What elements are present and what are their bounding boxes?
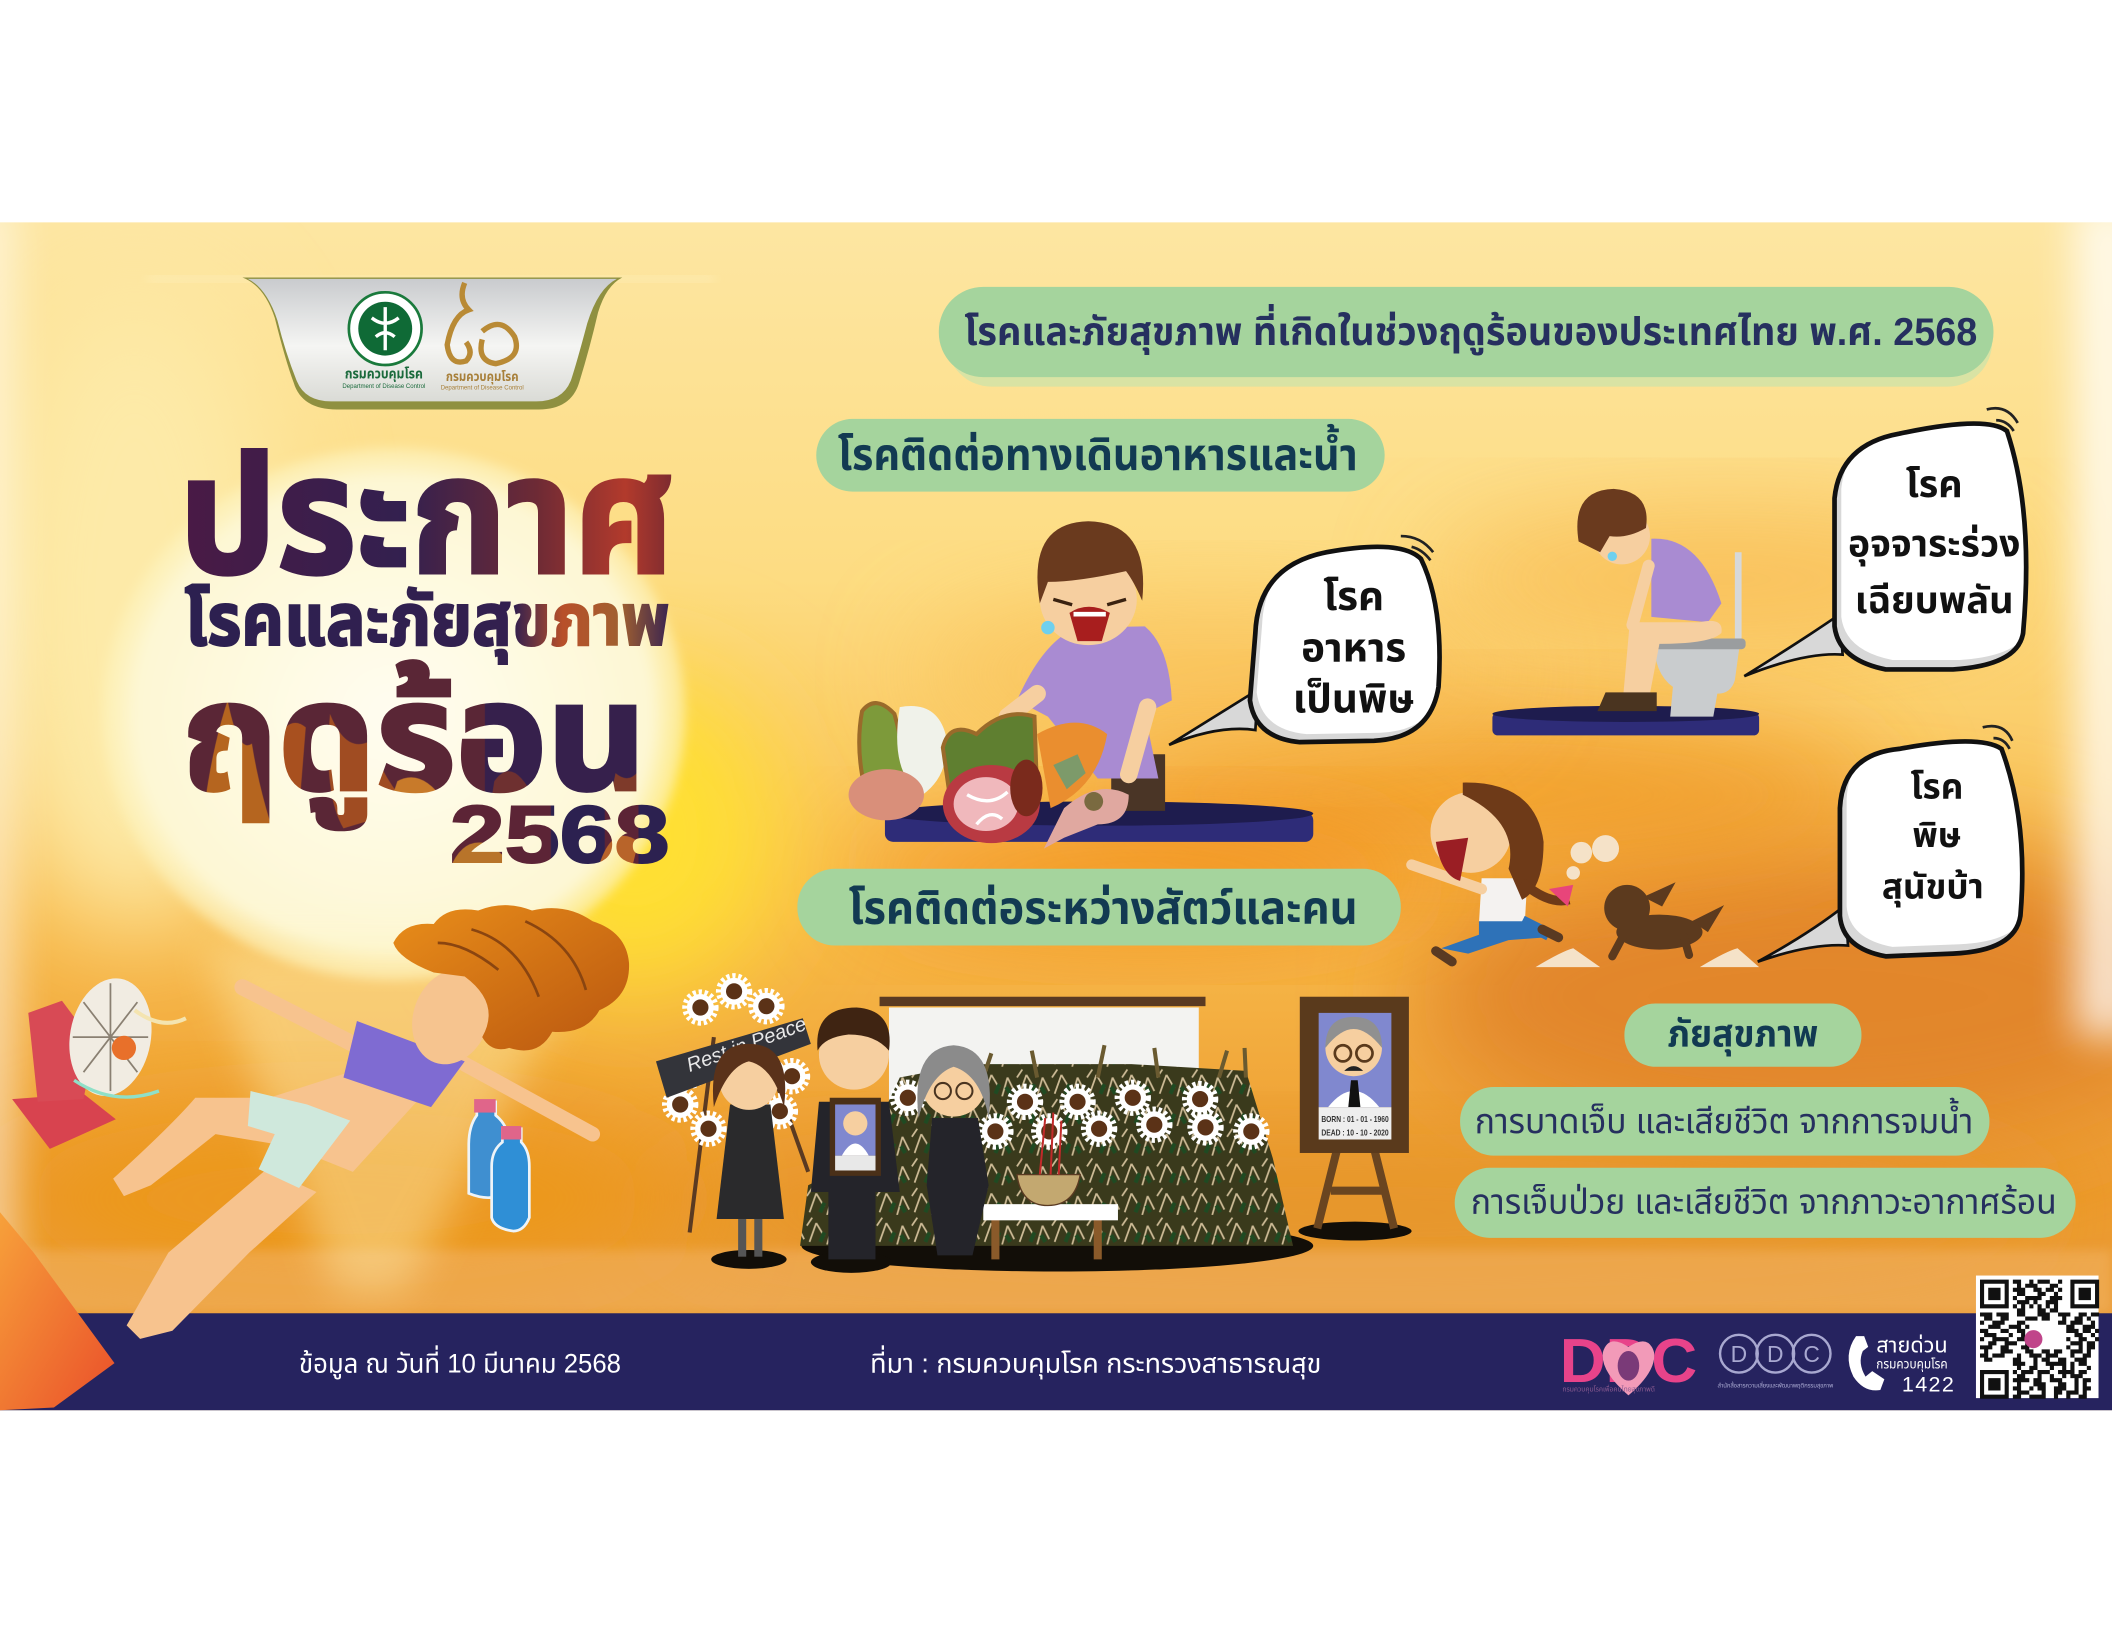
speech bubble	[1169, 536, 1446, 745]
hazard pill: heat: การเจ็บป่วย และเสียชีวิต จากภาวะอากาศร้อน	[1471, 1183, 2057, 1222]
table and bowl	[983, 1113, 1118, 1259]
heading pill: main topic: โรคและภัยสุขภาพ ที่เกิดในช่วงฤดูร้อนของประเทศไทย พ.ศ. 2568	[964, 304, 1977, 355]
icon: phone	[1849, 1336, 1884, 1390]
logo: ministry of public health seal	[349, 292, 422, 365]
dog	[1604, 882, 1724, 956]
speech bubble	[1744, 408, 2033, 676]
legs	[113, 1098, 317, 1339]
portrait on easel	[1298, 997, 1412, 1241]
logo captions	[342, 365, 524, 391]
bubble text: อาหาร	[1301, 624, 1406, 670]
head	[399, 958, 503, 1075]
bubble text: เป็นพิษ	[1293, 676, 1415, 722]
logo captions: กรมควบคุมโรค	[345, 365, 423, 382]
dust clouds	[1536, 835, 1759, 967]
bubble text: เฉียบพลัน	[1855, 579, 2014, 621]
bubble text: พิษ	[1912, 816, 1961, 855]
title line 2: โรคและภัยสุขภาพ	[185, 580, 669, 664]
wreath with banner	[656, 976, 811, 1232]
elderly woman mourner	[917, 1045, 990, 1255]
illustration: collapsed woman	[113, 905, 629, 1339]
decorative orange corner	[0, 1212, 114, 1410]
wreath with banner: Rest in Peace	[684, 1013, 809, 1077]
illustration: fan	[12, 972, 186, 1149]
bubble text: อุจจาระร่วง	[1848, 522, 2020, 566]
logo: DDC pink: DDC	[1560, 1327, 1697, 1396]
title line 3: ฤดูร้อน	[182, 652, 647, 829]
speech bubble	[1758, 726, 2029, 962]
man mourner with portrait	[811, 1008, 900, 1273]
heading pill: main topic	[939, 287, 1993, 387]
man	[1008, 521, 1172, 811]
logo: 60th anniversary	[447, 283, 516, 364]
spoiled food pile	[849, 703, 1129, 849]
platform	[1492, 706, 1759, 735]
logo: DDC pink: กรมควบคุมโรคเพื่อคนไทยสุขภาพดี	[1562, 1384, 1655, 1394]
logo: DDC outline: D	[1731, 1341, 1747, 1367]
logo captions: กรมควบคุมโรค	[446, 369, 519, 385]
bubble text: โรค	[1910, 768, 1963, 807]
hotline label: สายด่วน	[1876, 1332, 1948, 1357]
heading pill: zoonotic	[797, 869, 1401, 946]
heading pill: food and water borne: โรคติดต่อทางเดินอาหารและน้ำ	[838, 423, 1358, 480]
hotline	[1849, 1332, 1955, 1396]
title line 1: ประกาศ	[179, 423, 675, 607]
logo plaque	[148, 276, 714, 409]
footer text: source: ที่มา : กรมควบคุมโรค กระทรวงสาธารณสุข	[870, 1345, 1321, 1380]
logo: DDC outline: สำนักสื่อสารความเสี่ยงและพัฒนาพฤติกรรมสุขภาพ	[1717, 1380, 1833, 1390]
QR code	[1976, 1276, 2099, 1398]
torso	[269, 1071, 420, 1172]
woman mourner	[711, 1044, 787, 1269]
heading pill: zoonotic: โรคติดต่อระหว่างสัตว์และคน	[849, 883, 1358, 934]
logo: DDC outline: D	[1767, 1341, 1784, 1367]
footer bar	[0, 1313, 2112, 1410]
hotline department: กรมควบคุมโรค	[1876, 1356, 1948, 1372]
ground shadow	[801, 1220, 1313, 1272]
bubble text: สุนัขบ้า	[1882, 867, 1984, 907]
hazard pill: drowning: การบาดเจ็บ และเสียชีวิต จากการจมน้ำ	[1475, 1097, 1973, 1141]
logo captions: Department of Disease Control	[441, 385, 524, 391]
flower hedge	[800, 1045, 1293, 1246]
portrait on easel: DEAD : 10 - 10 - 2020	[1321, 1128, 1389, 1137]
bubble text: โรค	[1323, 573, 1384, 619]
illustration: funeral scene	[656, 976, 1412, 1273]
shirt	[343, 1021, 465, 1107]
hotline number: 1422	[1902, 1371, 1955, 1396]
bubble text	[1848, 463, 2020, 621]
illustration: water bottles	[469, 1099, 529, 1231]
hazard pill: heat	[1455, 1168, 2076, 1238]
logo captions: Department of Disease Control	[342, 384, 425, 390]
heading pill: health hazards	[1624, 1003, 1861, 1067]
illustration: diarrhea man on toilet	[1492, 408, 2033, 735]
logo: DDC outline: C	[1803, 1341, 1820, 1367]
toilet	[1649, 552, 1746, 717]
girl	[1412, 783, 1573, 962]
bubble text: โรค	[1906, 463, 1963, 505]
logo: DDC outline	[1717, 1335, 1833, 1390]
man	[1577, 489, 1722, 711]
arms	[242, 987, 593, 1134]
hazard pill: drowning	[1460, 1087, 1989, 1156]
heading pill: health hazards: ภัยสุขภาพ	[1668, 1013, 1818, 1057]
main title	[179, 423, 675, 880]
title year: 2568	[450, 790, 669, 880]
poster background	[0, 202, 2112, 1410]
portrait on easel: BORN : 01 - 01 - 1960	[1321, 1115, 1389, 1124]
bubble text	[1293, 573, 1415, 722]
bubble text	[1882, 768, 1984, 907]
footer text: data date: ข้อมูล ณ วันที่ 10 มีนาคม 2568	[299, 1345, 621, 1380]
illustration: girl chased by rabid dog	[1412, 726, 2029, 967]
illustration: sick man with spoiled food	[849, 521, 1446, 849]
platform	[885, 801, 1313, 842]
white backdrop	[880, 997, 1206, 1104]
shorts	[248, 1091, 350, 1188]
heading pill: food and water borne	[816, 419, 1385, 492]
hair	[393, 905, 629, 1050]
